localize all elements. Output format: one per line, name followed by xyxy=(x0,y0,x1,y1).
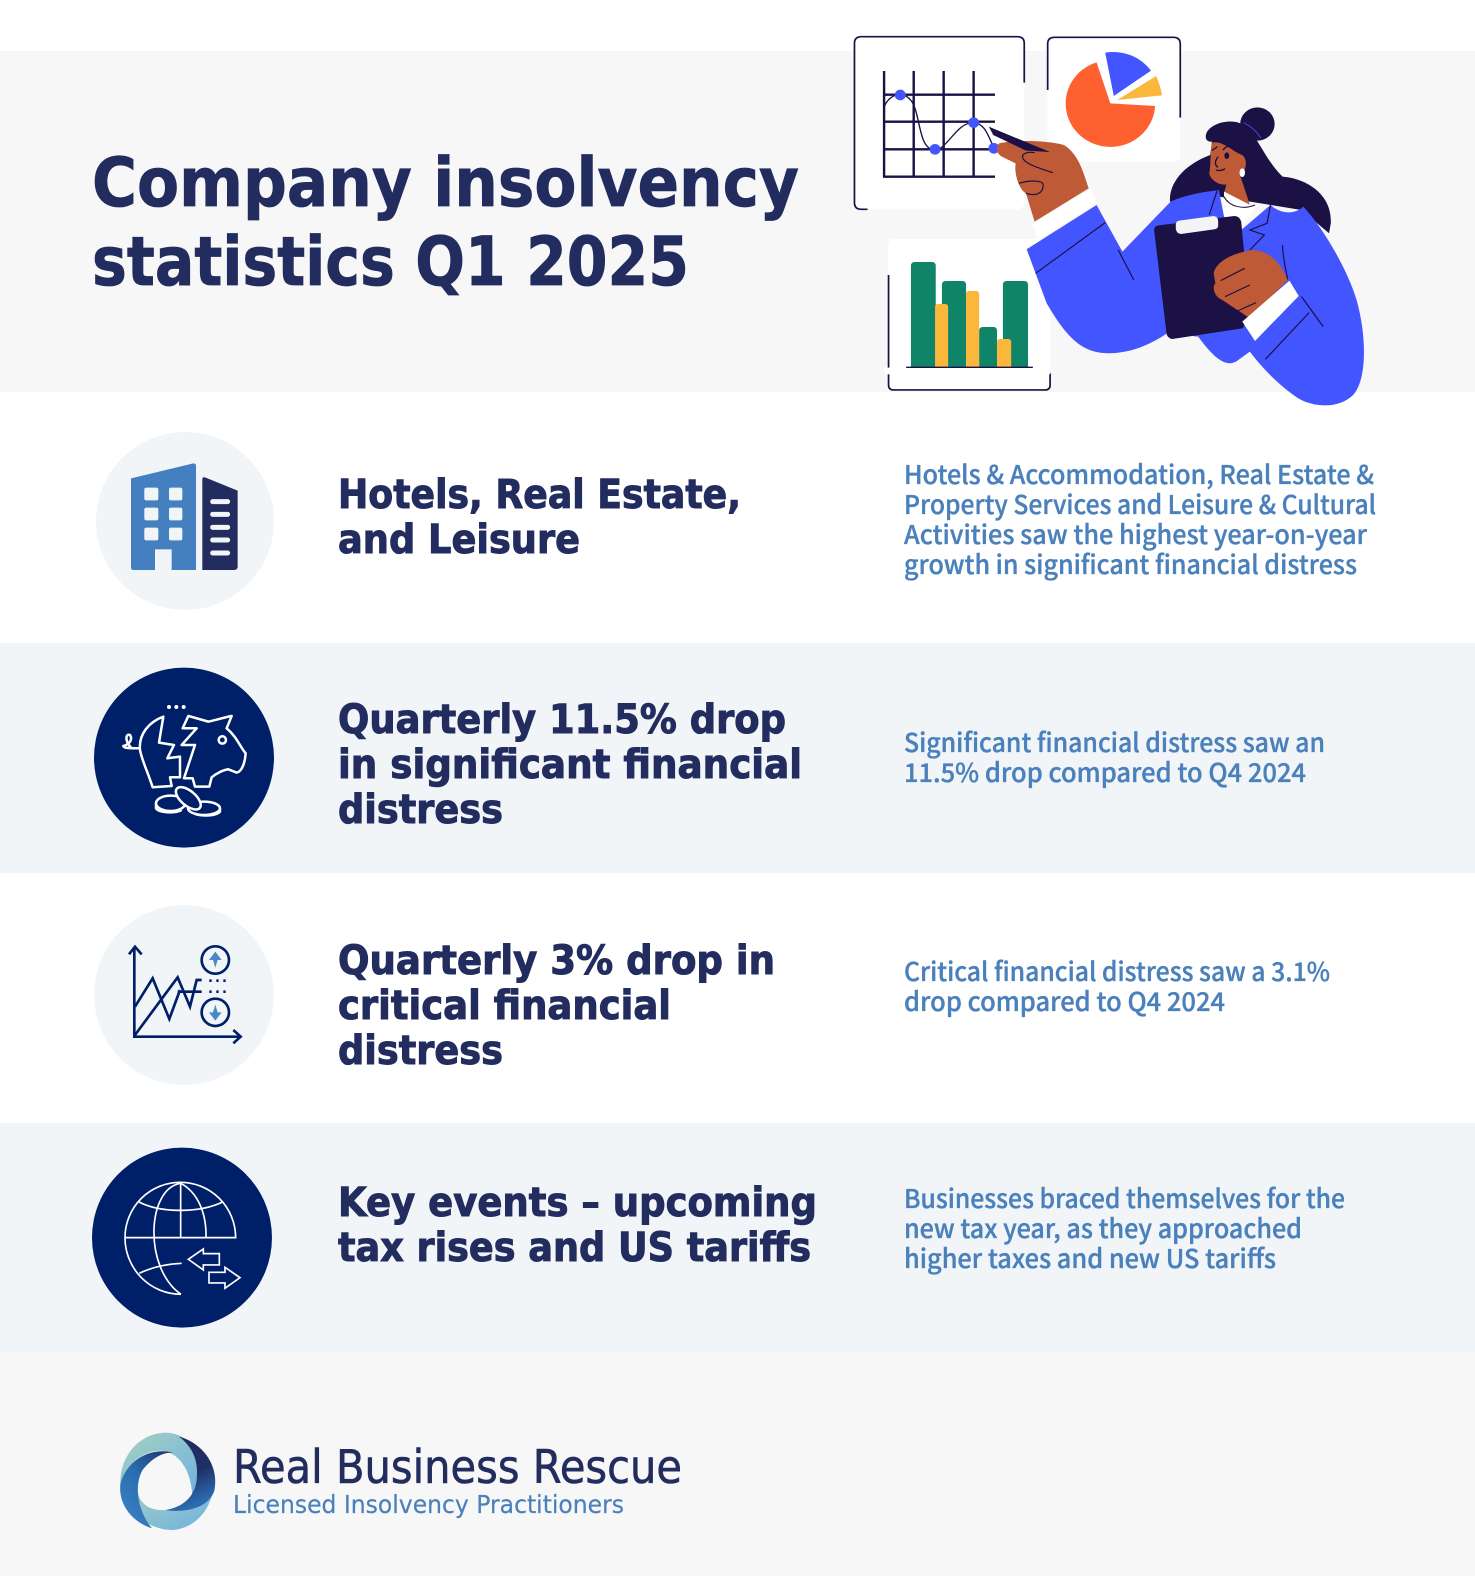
row 3 description xyxy=(904,952,1330,1019)
title xyxy=(92,144,799,302)
row 1 description: Activities saw the highest year-on-year xyxy=(904,515,1367,552)
row 4 icon: globe with arrows xyxy=(92,1148,272,1328)
row 3 heading: critical financial xyxy=(338,983,671,1029)
row 2 icon: broken piggy bank xyxy=(94,668,274,848)
row 1 heading: Hotels, Real Estate, xyxy=(338,472,741,518)
row 2 heading xyxy=(338,697,802,833)
row 3 heading xyxy=(338,938,775,1074)
logo mark xyxy=(120,1433,215,1530)
title: Company insolvency xyxy=(92,144,799,223)
row 2 heading: in significant financial xyxy=(338,742,802,788)
footer band xyxy=(0,1352,1475,1576)
row 4 heading xyxy=(338,1180,817,1271)
row 2 heading: Quarterly 11.5% drop xyxy=(338,697,786,743)
woman figure xyxy=(989,107,1364,405)
logo tagline: Licensed Insolvency Practitioners xyxy=(233,1490,624,1519)
row 1 heading: and Leisure xyxy=(338,517,580,563)
row 4 description xyxy=(904,1179,1345,1276)
row band 4 xyxy=(0,1123,1475,1352)
row 2 description xyxy=(904,723,1325,790)
row band 2 xyxy=(0,643,1475,873)
header band xyxy=(0,51,1475,392)
row 1 description: growth in significant financial distress xyxy=(904,545,1357,582)
row 4 heading: Key events – upcoming xyxy=(338,1180,817,1226)
row 3 description: drop compared to Q4 2024 xyxy=(904,982,1225,1019)
row 4 description: higher taxes and new US tariffs xyxy=(904,1239,1276,1276)
row 4 description: Businesses braced themselves for the xyxy=(904,1179,1345,1216)
title: statistics Q1 2025 xyxy=(92,223,689,302)
row 1 icon: building xyxy=(96,432,274,610)
row 1 description: Property Services and Leisure & Cultural xyxy=(904,485,1376,522)
line chart panel xyxy=(854,37,1024,209)
row 3 icon: rising and falling chart xyxy=(94,905,274,1085)
row 2 description: Significant financial distress saw an xyxy=(904,723,1325,760)
row 3 description: Critical financial distress saw a 3.1% xyxy=(904,952,1330,989)
row 2 description: 11.5% drop compared to Q4 2024 xyxy=(904,753,1306,790)
row 1 description: Hotels & Accommodation, Real Estate & xyxy=(904,455,1374,492)
row 3 heading: distress xyxy=(338,1028,503,1074)
logo wordmark: Real Business Rescue xyxy=(233,1440,682,1494)
bar chart panel xyxy=(885,239,1050,390)
pie chart panel xyxy=(1047,37,1180,162)
row 1 description xyxy=(904,455,1376,582)
row 1 heading xyxy=(338,472,741,563)
illustration: analyst presenting charts xyxy=(854,37,1364,405)
row 4 heading: tax rises and US tariffs xyxy=(338,1225,811,1271)
row 3 heading: Quarterly 3% drop in xyxy=(338,938,775,984)
row 4 description: new tax year, as they approached xyxy=(904,1209,1302,1246)
row 2 heading: distress xyxy=(338,787,503,833)
